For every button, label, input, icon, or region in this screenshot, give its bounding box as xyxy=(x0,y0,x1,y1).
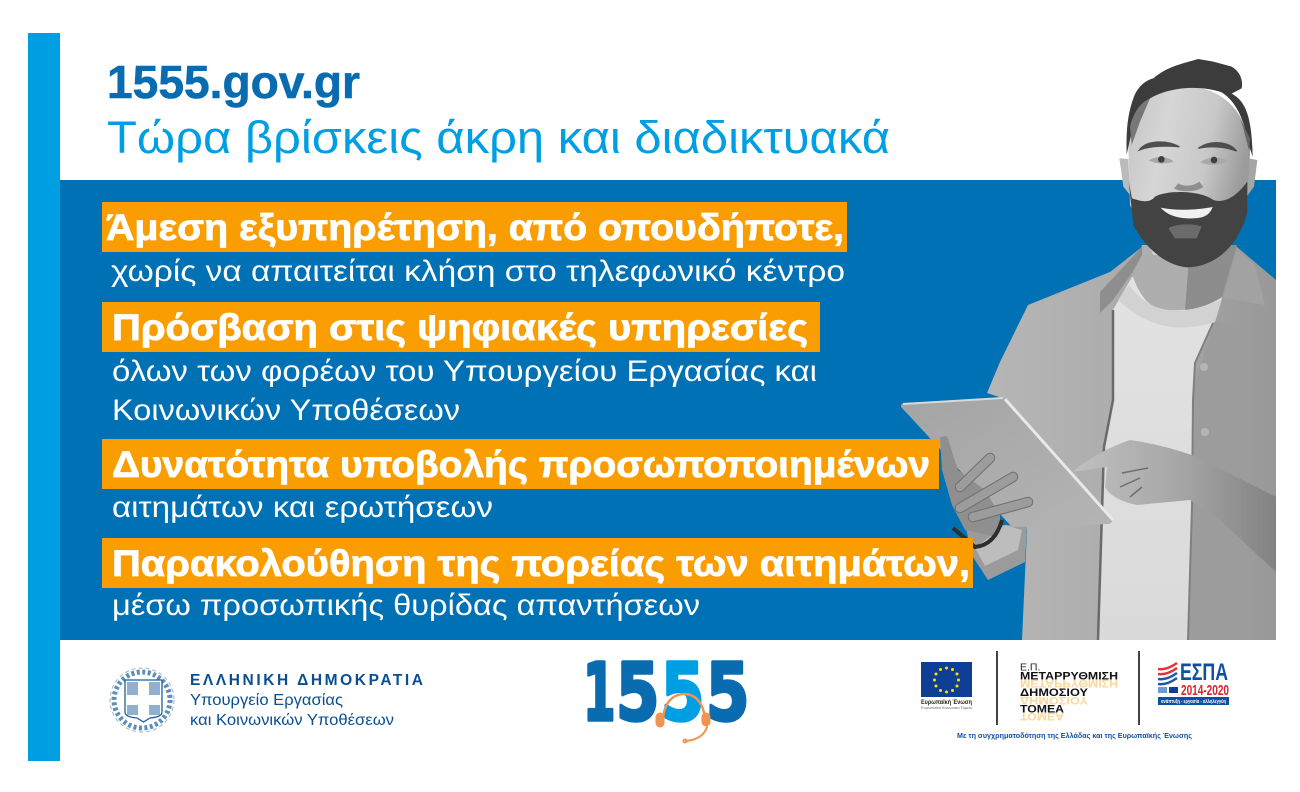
co-funding caption: Με τη συγχρηματοδότηση της Ελλάδας και της Ευρωπαϊκής Ένωσης xyxy=(957,731,1192,740)
label EP: Ε.Π. xyxy=(1020,662,1040,674)
logo: ESPA 2014-2020 xyxy=(1158,659,1229,705)
reflections xyxy=(1020,677,1118,722)
icon: headset xyxy=(660,694,707,742)
ESPA years: 2014-2020 xyxy=(1181,682,1229,699)
panel: blue benefits background xyxy=(60,180,1276,640)
heading 1: Άμεση εξυπηρέτηση, από οπουδήποτε, xyxy=(106,207,844,248)
EU flag xyxy=(921,662,972,697)
programme line 2: ΔΗΜΟΣΙΟΥ xyxy=(1020,687,1089,699)
text 2 second line: Κοινωνικών Υποθέσεων xyxy=(112,394,460,427)
programme line 1: ΜΕΤΑΡΡΥΘΜΙΣΗ xyxy=(1020,670,1118,682)
benefit 4 xyxy=(102,538,973,622)
icon: Hellenic Republic emblem xyxy=(110,668,174,732)
small flags xyxy=(1158,687,1178,693)
EU label: Ευρωπαϊκή Ένωση xyxy=(921,699,972,706)
benefit 2 xyxy=(102,302,820,427)
organization name: ΕΛΛΗΝΙΚΗ ΔΗΜΟΚΡΑΤΙΑ xyxy=(190,672,423,689)
logo: 1555: 5 xyxy=(616,647,659,739)
heading 2: Πρόσβαση στις ψηφιακές υπηρεσίες xyxy=(112,307,808,348)
ESPA motto: ανάπτυξη - εργασία - αλληλεγγύη xyxy=(1161,699,1226,705)
reflections: ΜΕΤΑΡΡΥΘΜΙΣΗ xyxy=(1020,677,1118,689)
logo: 1555 xyxy=(583,647,749,742)
subtitle: Τώρα βρίσκεις άκρη και διαδικτυακά xyxy=(107,112,890,163)
highlight bar 2 xyxy=(102,302,820,352)
reflections: ΔΗΜΟΣΙΟΥ xyxy=(1020,694,1089,706)
heading 4: Παρακολούθηση της πορείας των αιτημάτων, xyxy=(112,543,970,584)
fund label: Ευρωπαϊκό Κοινωνικό Ταμείο xyxy=(921,705,973,710)
text 3: αιτημάτων και ερωτήσεων xyxy=(112,491,493,524)
watch band xyxy=(953,520,1002,547)
left sleeve xyxy=(965,525,1027,580)
logo: 1555: 5 xyxy=(706,647,749,739)
highlight bar 3 xyxy=(102,439,939,489)
logo: European Union xyxy=(921,662,973,710)
hands xyxy=(940,436,1276,572)
left accent bar xyxy=(28,33,60,761)
head xyxy=(1119,59,1257,267)
highlight bar 1 xyxy=(102,202,847,252)
pointing hand and forearm xyxy=(1072,440,1276,572)
programme line 3: ΤΟΜΕΑ xyxy=(1020,704,1064,716)
title: 1555.gov.gr xyxy=(107,56,360,108)
ministry name line 1: Υπουργείο Εργασίας xyxy=(190,692,343,709)
benefit 3 xyxy=(102,439,939,524)
reflections: ΤΟΜΕΑ xyxy=(1020,710,1064,722)
flag stars xyxy=(933,666,960,694)
heading 3: Δυνατότητα υποβολής προσωποποιημένων xyxy=(112,444,930,485)
logo: 1555: 5 xyxy=(661,647,704,739)
text 4: μέσω προσωπικής θυρίδας απαντήσεων xyxy=(112,589,700,622)
tablet xyxy=(901,398,1113,527)
shirt and torso xyxy=(965,245,1276,640)
text 2: όλων των φορέων του Υπουργείου Εργασίας και xyxy=(112,355,817,388)
benefit 1 xyxy=(102,202,847,288)
person with tablet xyxy=(901,59,1276,640)
left hand xyxy=(940,436,1000,537)
ministry logo text xyxy=(190,672,423,729)
logo: 1555: 1 xyxy=(583,647,616,740)
ESPA wordmark: ΕΣΠΑ xyxy=(1180,659,1228,686)
text 1: χωρίς να απαιτείται κλήση στο τηλεφωνικό κέντρο xyxy=(111,255,845,288)
highlight bar 4 xyxy=(102,538,973,588)
ESPA motto strip xyxy=(1158,697,1229,705)
logo: Public Sector Reform programme xyxy=(1020,662,1118,722)
ministry name line 2: και Κοινωνικών Υποθέσεων xyxy=(190,712,394,729)
ESPA waves xyxy=(1158,663,1177,684)
